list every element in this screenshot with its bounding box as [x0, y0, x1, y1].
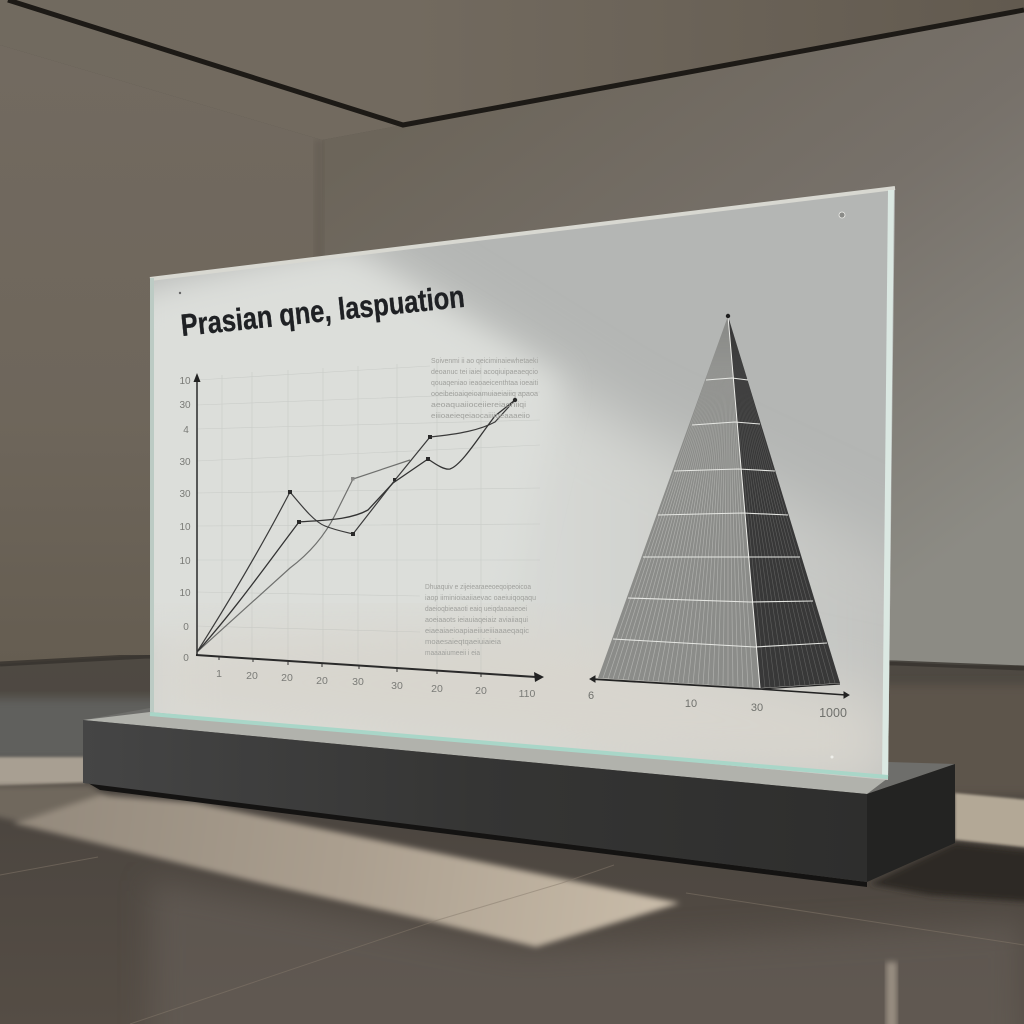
- series two: [197, 400, 515, 652]
- text block lower: Dhuaquiv e zijeiearaeeoeqoipeoicoa: [425, 584, 531, 591]
- text block lower: [425, 584, 536, 657]
- series gray: [197, 460, 410, 652]
- x axis labels: [216, 668, 536, 700]
- pyramid ridge: [728, 316, 760, 688]
- text block lower: aoeiaaots ieiauiaqeiaiz aviaiiaqui: [425, 617, 528, 624]
- lower glow: [182, 642, 889, 780]
- floor sheen right: [880, 685, 1024, 795]
- x axis labels: 20: [246, 670, 258, 682]
- glass surface: [150, 187, 895, 780]
- glass right edge: [885, 190, 891, 778]
- pyramid axis labels: 6: [588, 690, 594, 702]
- pyramid axis labels: [588, 690, 847, 720]
- floor seam lines: [0, 857, 1024, 1024]
- right face stripes: [734, 368, 836, 688]
- pyramid chart: [588, 314, 849, 720]
- x axis labels: 20: [316, 675, 328, 687]
- pyramid axis labels: 1000: [819, 706, 847, 720]
- floor: [0, 655, 1024, 1024]
- text block lower: maaaaiumeeii i eia: [425, 650, 480, 657]
- pyramid left face: [598, 316, 760, 688]
- floor main sunlight patch: [13, 795, 680, 947]
- data points: [288, 398, 517, 536]
- left bright reinforcement: [154, 256, 558, 410]
- pyramid apex: [726, 314, 730, 318]
- y axis labels: 4: [183, 425, 189, 436]
- x axis: [196, 655, 544, 682]
- text block lower: eiaeaiaeioapiaeiiueiiiaaaeqaqic: [425, 628, 530, 635]
- small mark lower: [830, 756, 834, 758]
- x axis labels: 20: [475, 685, 487, 697]
- floor light patch right: [955, 793, 1024, 848]
- text block upper: Soivenmi ii ao qeiciminaiewhetaeki: [431, 358, 538, 365]
- x axis labels: 30: [391, 680, 403, 692]
- room: ceiling and walls: [0, 0, 1024, 666]
- y axis labels: [179, 376, 191, 664]
- pyramid base axis: [590, 676, 849, 698]
- line chart: [179, 360, 544, 700]
- floor reflection: [886, 962, 897, 1024]
- y axis labels: 0: [183, 653, 189, 664]
- plinth front: [83, 720, 867, 882]
- text block lower: iaop iiminioiaaiiaevac oaeiuiqoqaqu: [425, 595, 536, 602]
- small mark: [179, 292, 181, 294]
- text block upper: ooeibeioaiqeioamuiaeiaiiiq apaoa: [431, 391, 538, 398]
- wall corner shading: [314, 140, 324, 655]
- floor lighter area lower: [150, 880, 1024, 1024]
- text block upper: deoanuc tei iaiei acoqiuipaeaeqcio: [431, 369, 538, 376]
- pyramid axis labels: 30: [751, 702, 763, 714]
- shadow right of plinth: [870, 843, 1024, 902]
- y axis labels: 0: [183, 622, 189, 633]
- y axis labels: 10: [179, 556, 191, 567]
- text block upper: [431, 358, 538, 420]
- pyramid right face: [728, 316, 840, 688]
- glass left edge: [150, 278, 154, 712]
- ceiling: [0, 0, 1024, 140]
- x axis labels: 20: [281, 672, 293, 684]
- y axis labels: 10: [179, 522, 191, 533]
- floor surface: [96, 658, 950, 665]
- glass bottom edge: [150, 714, 888, 777]
- grid: [197, 360, 540, 675]
- plinth lit strip: [83, 712, 888, 794]
- skirting shadow: [0, 656, 1024, 668]
- plinth top: [83, 708, 955, 794]
- x axis labels: 30: [352, 676, 364, 688]
- text block upper: qouaqeniao ieaoaeicenthtaa ioeaiti: [431, 380, 538, 387]
- bright diagonal: [152, 252, 891, 780]
- floor glow under plinth left: [0, 785, 110, 822]
- text block upper: eiiioaeieqeiaocaiiiiqeaaaeiio: [431, 413, 530, 420]
- left face stripes: [602, 370, 754, 688]
- ceiling groove: [8, 0, 1024, 125]
- y axis labels: 30: [179, 457, 191, 468]
- text block upper: aeoaquaiioceiiereiaoniiqi: [431, 402, 527, 409]
- text block lower: moaesaieqtqaeiuiaieia: [425, 639, 501, 646]
- y axis labels: 30: [179, 489, 191, 500]
- series one: [197, 400, 515, 652]
- x axis labels: 1: [216, 668, 222, 680]
- title: Prasian qne, laspuation: [179, 279, 466, 343]
- mounting screw: [839, 212, 845, 218]
- floor light patch left: [0, 757, 85, 786]
- panel lighting: [152, 252, 891, 780]
- glass top edge: [150, 188, 895, 279]
- y axis: [194, 373, 200, 656]
- y axis labels: 30: [179, 400, 191, 411]
- y axis labels: 10: [179, 588, 191, 599]
- right wall: [322, 10, 1024, 666]
- left wall: [0, 45, 322, 664]
- tier lines: [613, 378, 827, 647]
- cool floor sheen left: [0, 696, 150, 758]
- plinth: [83, 708, 955, 887]
- plinth contact shadow: [88, 783, 867, 887]
- x axis labels: 20: [431, 683, 443, 695]
- plinth side: [867, 764, 955, 882]
- text block lower: daeioqbieaaoti eaiq ueiqdaoaaeoei: [425, 606, 527, 613]
- glass panel: [130, 187, 920, 810]
- pyramid axis labels: 10: [685, 698, 697, 710]
- y axis labels: 10: [179, 376, 191, 387]
- x axis labels: 110: [519, 688, 536, 700]
